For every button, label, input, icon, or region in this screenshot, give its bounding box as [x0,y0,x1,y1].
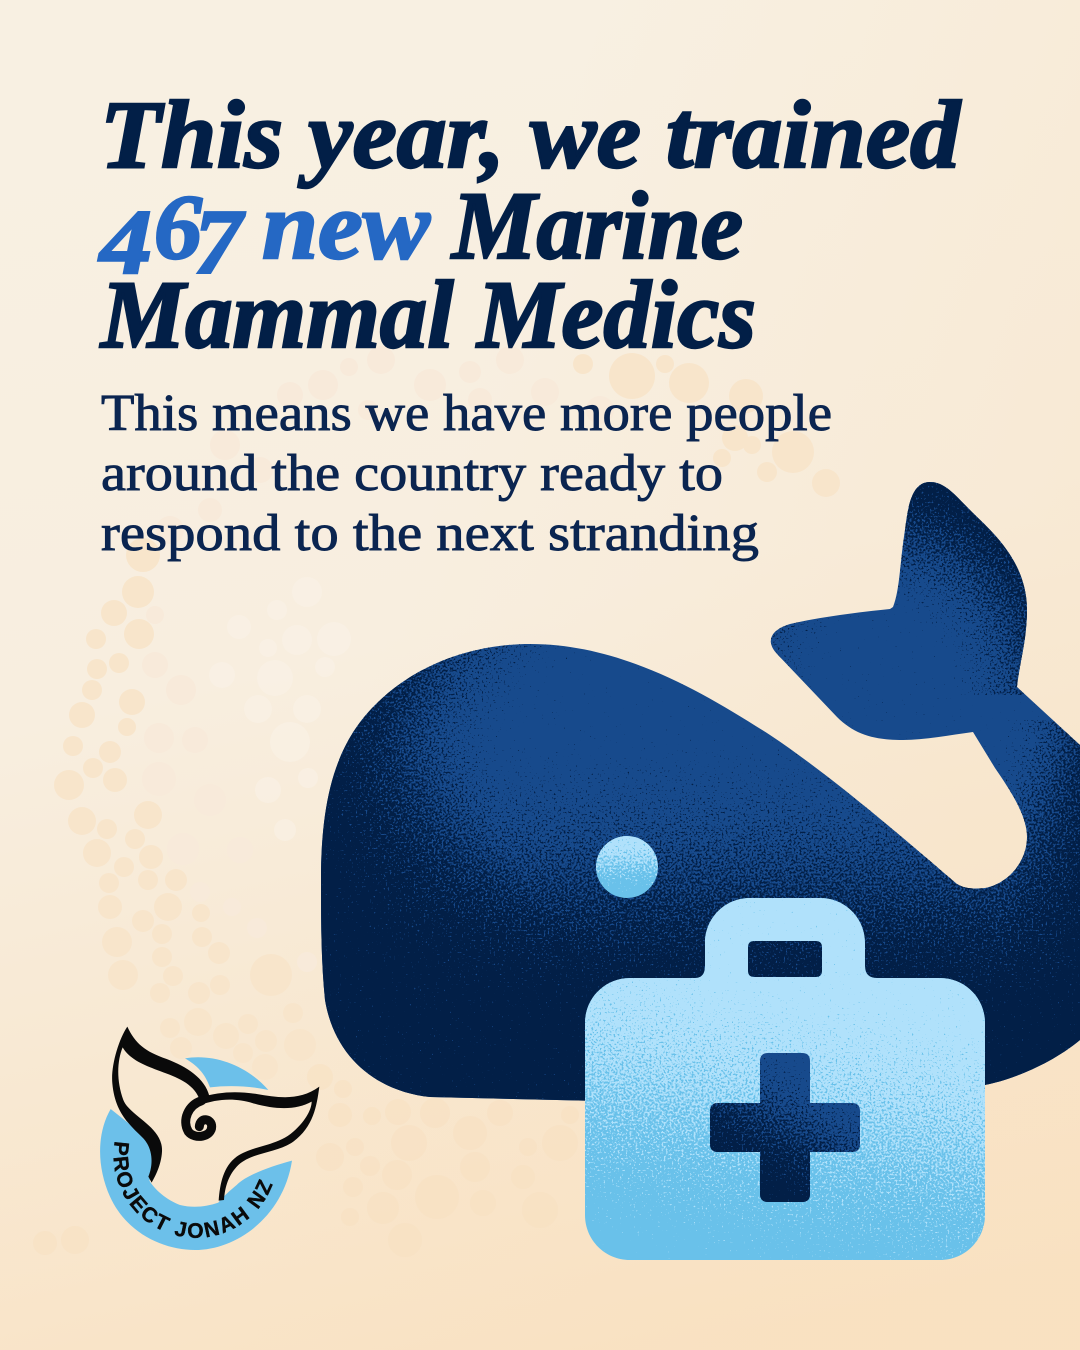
title line 2 [98,172,743,293]
logo wordmark: PROJECT JONAH NZ [113,1142,273,1238]
icon: medical cross [710,1053,860,1202]
title line 2: 6 [154,176,202,278]
title line 3: Mammal Medics [99,261,756,368]
subtitle text: around the country ready to [101,445,723,502]
logo whale tail outline [112,1027,319,1201]
subtitle text: respond to the next stranding [101,505,759,562]
title line 1: This year, we trained [100,81,962,188]
subtitle text: This means we have more people [101,385,832,442]
icon: medical case [585,898,985,1260]
background dot pattern [33,346,840,1257]
logo blue arc top [185,1057,268,1090]
title line 2: 4 [98,191,152,293]
title line 2: Marine [450,172,743,279]
title [98,81,962,368]
icon: whale [300,470,1080,1120]
icon: whale eye [596,836,658,898]
subtitle text [101,385,832,562]
logo: Project Jonah NZ [100,1026,320,1250]
title line 2: new [262,172,431,279]
logo blue ring [100,1109,292,1250]
title line 2: 7 [194,191,246,293]
